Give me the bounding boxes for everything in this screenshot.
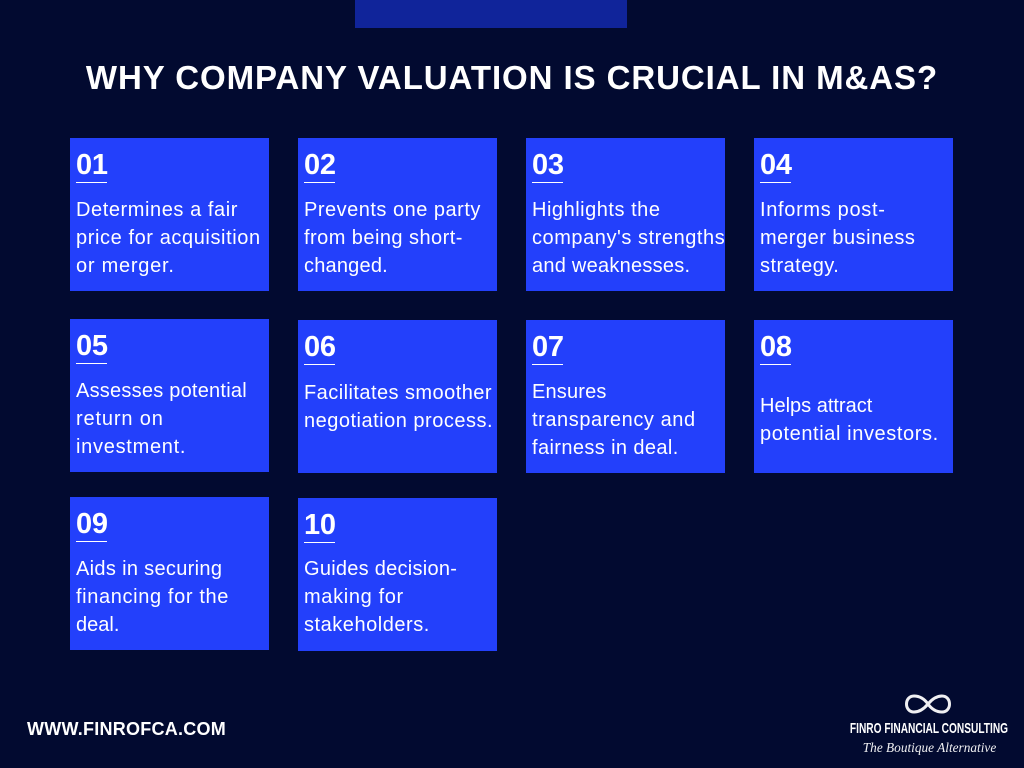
- panel: 06: 06: [304, 331, 336, 363]
- panel: 10: [298, 498, 497, 651]
- top accent bar: [355, 0, 627, 28]
- panel: 04: Informs post-: [760, 199, 886, 221]
- panel: 08: [754, 320, 953, 473]
- panel: 01: [70, 138, 269, 291]
- icon: infinity: [905, 694, 951, 714]
- panel: 09: Aids in securing: [76, 558, 222, 580]
- panel: 05: investment.: [76, 436, 186, 458]
- company name: FINRO FINANCIAL CONSULTING: [850, 720, 1008, 737]
- panel: 07: fairness in deal.: [532, 437, 679, 459]
- panel: 04: 04: [760, 149, 792, 181]
- panel: 06: negotiation process.: [304, 410, 493, 432]
- panel: 02: changed.: [304, 255, 388, 277]
- website url: WWW.FINROFCA.COM: [27, 719, 226, 739]
- panel: 02: [298, 138, 497, 291]
- panel: 09: [70, 497, 269, 650]
- panel: 05: return on: [76, 408, 164, 430]
- logo: [850, 694, 1008, 755]
- panel: 03: 03: [532, 149, 564, 181]
- panel: 07: Ensures: [532, 381, 607, 403]
- panel: 10: 10: [304, 509, 336, 541]
- panel: 07: 07: [532, 331, 564, 363]
- panel: 04: merger business: [760, 227, 915, 249]
- panel: 05: [70, 319, 269, 472]
- panel: 02: from being short-: [304, 227, 463, 249]
- panel: 02: Prevents one party: [304, 199, 481, 221]
- panel: 01: or merger.: [76, 255, 175, 277]
- panel: 04: [754, 138, 953, 291]
- panel: 04: strategy.: [760, 255, 839, 277]
- tagline: The Boutique Alternative: [863, 740, 996, 755]
- panel: 03: Highlights the: [532, 199, 660, 221]
- panel: 05: 05: [76, 330, 108, 362]
- panel: 08: Helps attract: [760, 395, 872, 417]
- panel: 03: [526, 138, 725, 291]
- panel: 07: transparency and: [532, 409, 696, 431]
- panel: 01: 01: [76, 149, 108, 181]
- panel: 01: Determines a fair: [76, 199, 238, 221]
- panel: 06: [298, 320, 497, 473]
- panel: 08: potential investors.: [760, 423, 939, 445]
- panel: 10: stakeholders.: [304, 614, 430, 636]
- panel: 08: 08: [760, 331, 792, 363]
- panel: 09: financing for the: [76, 586, 229, 608]
- panel: 05: Assesses potential: [76, 380, 247, 402]
- panel: 09: deal.: [76, 614, 119, 636]
- panel: 10: Guides decision-: [304, 558, 457, 580]
- panel: 02: 02: [304, 149, 336, 181]
- panel: 09: 09: [76, 508, 108, 540]
- panel: 01: price for acquisition: [76, 227, 261, 249]
- title: WHY COMPANY VALUATION IS CRUCIAL IN M&AS?: [86, 59, 938, 96]
- panel: 03: company's strengths: [532, 227, 725, 249]
- panel: 06: Facilitates smoother: [304, 382, 492, 404]
- panel: 10: making for: [304, 586, 404, 608]
- panel: 03: and weaknesses.: [532, 255, 690, 277]
- panel: 07: [526, 320, 725, 473]
